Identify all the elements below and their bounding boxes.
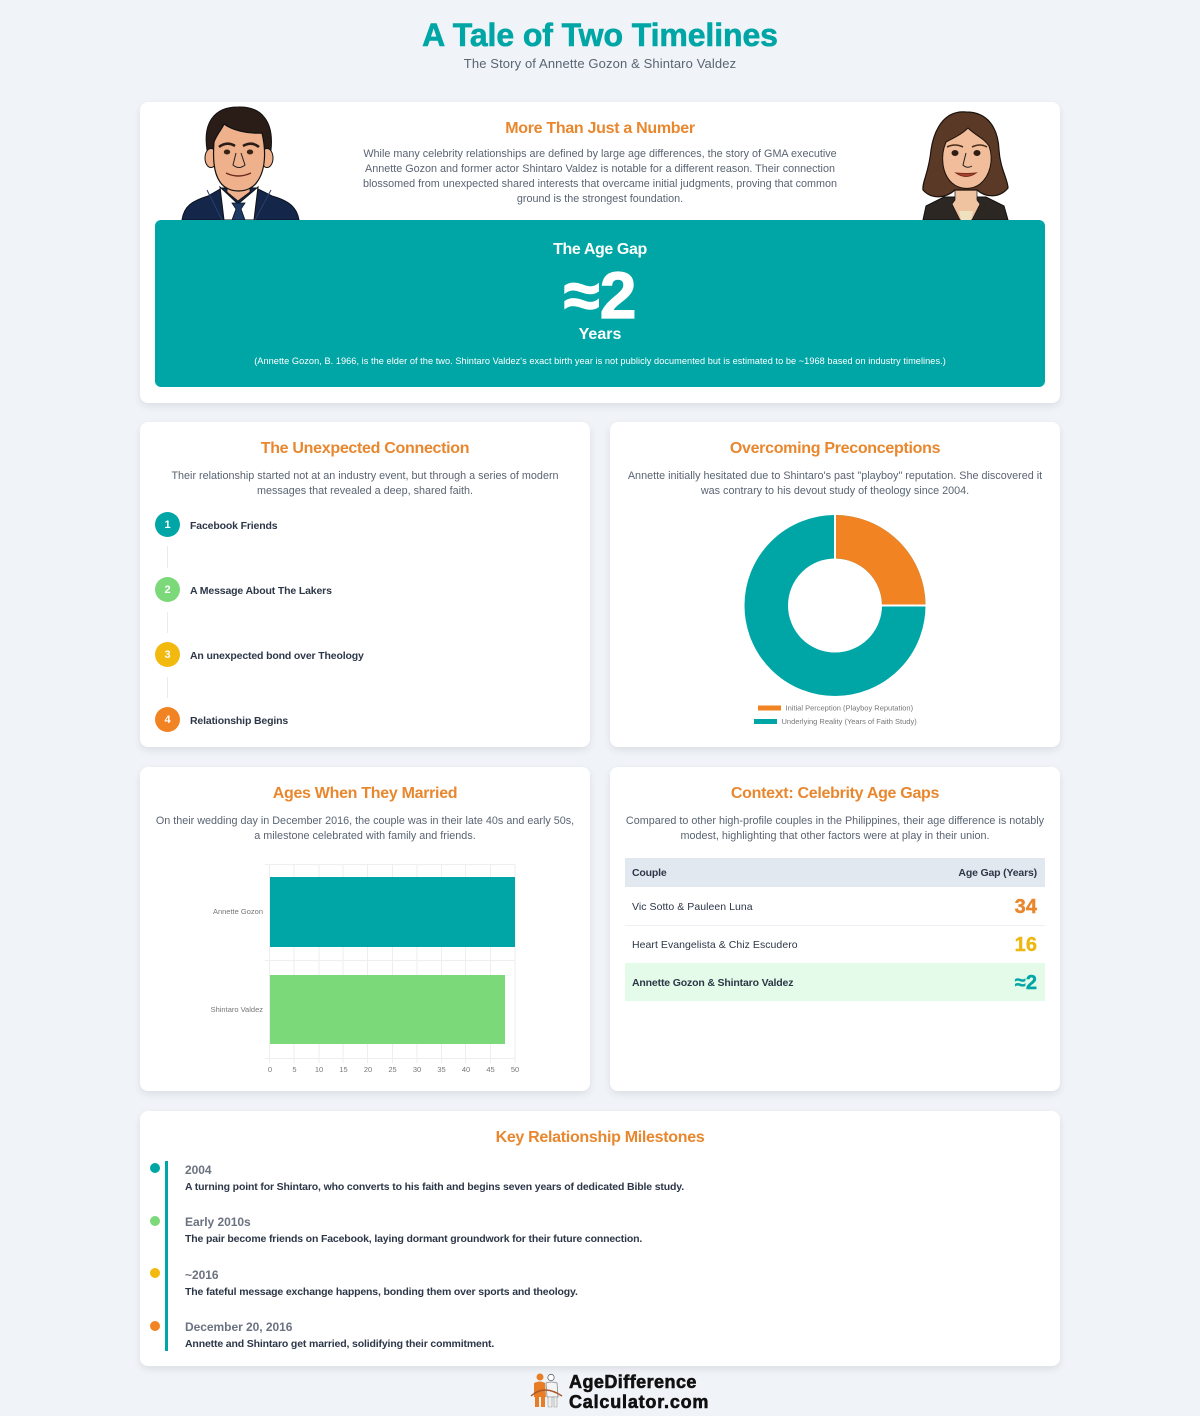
step 4 badge: 4 — [164, 714, 171, 726]
age gap unit: Years — [579, 326, 621, 343]
step 3 badge — [155, 642, 180, 667]
heading: ages: Ages When They Married — [273, 785, 457, 802]
milestone text 2004: A turning point for Shintaro, who converts to his faith and begins seven years of dedicated Bible study. — [185, 1181, 684, 1193]
text block: intro — [363, 148, 837, 205]
panel: intro and age gap — [140, 102, 1060, 403]
bar chart: 40 — [462, 1065, 470, 1074]
milestone text early 2010s: The pair become friends on Facebook, laying dormant groundwork for their future connection. — [185, 1233, 642, 1245]
milestone dot december 2016 — [150, 1321, 160, 1331]
milestone year december 2016: December 20, 2016 — [185, 1320, 292, 1334]
age gap number: ≈2 — [564, 258, 636, 332]
text block: intro: While many celebrity relationships are defined by large age differences, the story of GMA executive — [363, 148, 837, 160]
bar chart: 35 — [437, 1065, 446, 1074]
logo text: Calculator.com — [569, 1392, 709, 1412]
text block: preconceptions — [628, 470, 1042, 497]
bar chart: 10 — [315, 1065, 323, 1074]
chart legend — [754, 704, 917, 726]
text block: ages: On their wedding day in December 2016, the couple was in their late 40s and early 50s, — [156, 815, 574, 827]
bar chart: 25 — [388, 1065, 397, 1074]
header: age gap: Age Gap (Years) — [958, 867, 1037, 879]
milestone dot 2004 — [150, 1163, 160, 1173]
step 4 label: Relationship Begins — [190, 715, 288, 727]
table — [625, 858, 1045, 1001]
row 3 value: ≈2 — [1015, 972, 1037, 994]
milestone dot early 2010s — [150, 1216, 160, 1226]
step 2 badge — [155, 577, 180, 602]
milestone year 2004: 2004 — [185, 1163, 212, 1177]
text block: connection: messages that revealed a deep, shared faith. — [257, 485, 473, 497]
heading: milestones: Key Relationship Milestones — [496, 1129, 704, 1146]
bar chart — [211, 864, 519, 1074]
text block: preconceptions: Annette initially hesitated due to Shintaro's past "playboy" reputation. She discovered it — [628, 470, 1042, 482]
timeline line — [165, 1161, 168, 1351]
bar chart: 30 — [413, 1065, 421, 1074]
panel: age gap — [155, 220, 1045, 387]
chart legend: Underlying Reality (Years of Faith Study) — [782, 717, 917, 726]
step 1 badge: 1 — [164, 519, 171, 531]
text block: ages: a milestone celebrated with family and friends. — [254, 830, 476, 842]
chart legend: Initial Perception (Playboy Reputation) — [786, 704, 914, 712]
text block: intro: ground is the strongest foundation. — [517, 193, 683, 205]
bar chart: 20 — [364, 1065, 372, 1074]
bar chart: 0 — [268, 1065, 272, 1074]
bar chart: Shintaro Valdez — [211, 1005, 263, 1014]
bar chart: 45 — [486, 1065, 495, 1074]
step 1 badge — [155, 512, 180, 537]
header: couple: Couple — [632, 867, 667, 879]
heading: connection: The Unexpected Connection — [261, 440, 469, 457]
step 2 badge: 2 — [164, 584, 171, 596]
row 1 couple: Vic Sotto & Pauleen Luna — [632, 901, 753, 913]
donut chart — [744, 515, 926, 696]
bar chart: 5 — [292, 1065, 297, 1074]
row 3 highlight — [625, 963, 1045, 1001]
step 4 badge — [155, 707, 180, 732]
panel: ages when they married — [140, 767, 590, 1091]
milestone year early 2010s: Early 2010s — [185, 1215, 251, 1229]
text block: intro: Annette Gozon and former actor Shintaro Valdez is notable for a different reason. Their connection — [365, 163, 835, 175]
text block: connection — [171, 470, 559, 497]
step 1 label: Facebook Friends — [190, 520, 277, 532]
bar chart: 50 — [511, 1065, 519, 1074]
milestone year 2016: ~2016 — [185, 1268, 219, 1282]
heading: context: Context: Celebrity Age Gaps — [731, 785, 939, 802]
text block: connection: Their relationship started not at an industry event, but through a series of modern — [171, 470, 559, 482]
text block: context — [626, 815, 1044, 842]
step 2 label: A Message About The Lakers — [190, 585, 332, 597]
step 3 label: An unexpected bond over Theology — [190, 650, 364, 662]
text block: preconceptions: was contrary to his devout study of theology since 2004. — [701, 485, 969, 497]
text block: context: Compared to other high-profile couples in the Philippines, their age difference is notably — [626, 815, 1044, 827]
icon: woman portrait — [922, 111, 1009, 220]
milestone text december 2016: Annette and Shintaro get married, solidifying their commitment. — [185, 1338, 494, 1350]
bar chart: Annette Gozon — [213, 907, 263, 916]
icon: logo figures — [530, 1374, 562, 1408]
panel: key relationship milestones — [140, 1111, 1060, 1366]
footer logo — [530, 1372, 709, 1412]
milestone dot 2016 — [150, 1268, 160, 1278]
row 2 couple: Heart Evangelista & Chiz Escudero — [632, 939, 798, 951]
row 1 value: 34 — [1015, 896, 1037, 918]
logo text — [569, 1372, 709, 1412]
heading: preconceptions: Overcoming Preconceptions — [730, 440, 940, 457]
row 2 value: 16 — [1015, 934, 1037, 956]
bar chart: 15 — [339, 1065, 348, 1074]
step connector lines — [167, 546, 168, 698]
age gap heading: The Age Gap — [553, 241, 647, 258]
milestone text 2016: The fateful message exchange happens, bonding them over sports and theology. — [185, 1286, 578, 1298]
logo text: AgeDifference — [569, 1372, 697, 1392]
table header row — [625, 858, 1045, 887]
age gap note: (Annette Gozon, B. 1966, is the elder of the two. Shintaro Valdez's exact birth year is not publicly documented but is estimated to be ~1968 based on industry timelines.) — [254, 356, 946, 366]
step 3 badge: 3 — [164, 649, 171, 661]
text block: ages — [156, 815, 574, 842]
panel: overcoming preconceptions — [610, 422, 1060, 747]
panel: context celebrity age gaps — [610, 767, 1060, 1091]
panel: the unexpected connection — [140, 422, 590, 747]
subtitle: The Story of Annette Gozon & Shintaro Valdez — [464, 56, 736, 71]
row 3 couple: Annette Gozon & Shintaro Valdez — [632, 977, 793, 989]
heading: more than just a number: More Than Just a Number — [505, 120, 695, 137]
text block: context: modest, highlighting that other factors were at play in their union. — [680, 830, 990, 842]
icon: man portrait — [182, 106, 300, 220]
title: A Tale of Two Timelines — [422, 17, 778, 53]
text block: intro: blossomed from unexpected shared interests that overcame initial judgments, proving that common — [363, 178, 837, 190]
